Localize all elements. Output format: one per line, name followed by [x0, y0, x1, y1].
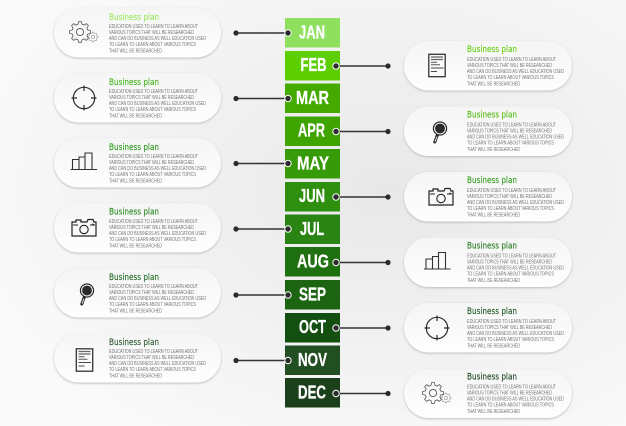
heading: Business plan [109, 273, 159, 283]
month: APR [285, 116, 340, 146]
text block [467, 188, 564, 218]
text block: EDUCATION USED TO LEARN TO LEARN ABOUT [109, 284, 199, 290]
text block: VARIOUS TOPICS THAT WILL BE RESEARCHED [467, 194, 552, 200]
month: MAR: MAR [296, 88, 329, 108]
month: AUG: AUG [297, 252, 329, 272]
icon: magnifier [80, 284, 94, 304]
panel: July plan [54, 203, 221, 252]
icon: gears [423, 383, 451, 403]
text block: THAT WILL BE RESEARCHED [467, 343, 520, 349]
panel: November plan [54, 333, 221, 382]
text block: AND CAN DO BUSINESS AS WELL EDUCATION USED [109, 101, 206, 107]
text block [109, 154, 206, 184]
connector: FEB [333, 63, 391, 69]
panel: September plan [54, 268, 221, 318]
panel: March plan [54, 73, 221, 122]
connector: MAY [233, 160, 291, 167]
panel: April plan [404, 106, 572, 156]
text block: EDUCATION USED TO LEARN TO LEARN ABOUT [467, 122, 557, 128]
text block: VARIOUS TOPICS THAT WILL BE RESEARCHED [467, 390, 552, 396]
text block: EDUCATION USED TO LEARN TO LEARN ABOUT [109, 154, 199, 160]
icon: bar chart [70, 153, 97, 170]
panel: January plan [54, 8, 221, 58]
text block: VARIOUS TOPICS THAT WILL BE RESEARCHED [109, 355, 194, 361]
text block: THAT WILL BE RESEARCHED [109, 178, 162, 184]
text block: TO LEARN TO LEARN ABOUT VARIOUS TOPICS [467, 75, 554, 81]
text block: VARIOUS TOPICS THAT WILL BE RESEARCHED [109, 95, 194, 101]
month: FEB: FEB [300, 55, 327, 75]
text block: TO LEARN TO LEARN ABOUT VARIOUS TOPICS [467, 141, 554, 147]
icon: document [76, 349, 93, 371]
text block [467, 122, 564, 153]
heading: Business plan [467, 307, 517, 317]
icon: magnifier [433, 122, 447, 142]
text block: AND CAN DO BUSINESS AS WELL EDUCATION USED [467, 135, 564, 141]
heading: Business plan [467, 242, 517, 252]
text block: TO LEARN TO LEARN ABOUT VARIOUS TOPICS [109, 107, 196, 113]
month: MAY: MAY [297, 154, 329, 174]
text block [467, 384, 564, 415]
text block: EDUCATION USED TO LEARN TO LEARN ABOUT [467, 57, 557, 63]
text block: VARIOUS TOPICS THAT WILL BE RESEARCHED [467, 325, 552, 331]
heading: Business plan [467, 176, 517, 186]
text block: EDUCATION USED TO LEARN TO LEARN ABOUT [109, 89, 199, 95]
text block: THAT WILL BE RESEARCHED [467, 409, 520, 415]
month: SEP [285, 280, 340, 310]
connector: AUG [333, 259, 391, 266]
month: APR: APR [298, 120, 325, 140]
text block [109, 219, 206, 249]
text block: THAT WILL BE RESEARCHED [467, 278, 520, 284]
text block: TO LEARN TO LEARN ABOUT VARIOUS TOPICS [109, 42, 196, 48]
panel: May plan [54, 138, 221, 188]
text block: TO LEARN TO LEARN ABOUT VARIOUS TOPICS [467, 337, 554, 343]
text block: EDUCATION USED TO LEARN TO LEARN ABOUT [467, 188, 557, 194]
text block: THAT WILL BE RESEARCHED [109, 373, 162, 379]
text block: TO LEARN TO LEARN ABOUT VARIOUS TOPICS [109, 302, 196, 308]
text block: TO LEARN TO LEARN ABOUT VARIOUS TOPICS [467, 272, 554, 278]
month: SEP: SEP [299, 284, 326, 304]
connector: NOV [233, 357, 291, 364]
icon: bar chart [424, 252, 450, 269]
text block: TO LEARN TO LEARN ABOUT VARIOUS TOPICS [109, 237, 196, 243]
text block: VARIOUS TOPICS THAT WILL BE RESEARCHED [109, 160, 194, 166]
heading: Business plan [467, 372, 517, 382]
icon: gears [70, 22, 98, 42]
text block: EDUCATION USED TO LEARN TO LEARN ABOUT [109, 24, 199, 30]
month: FEB [285, 51, 340, 80]
text block: VARIOUS TOPICS THAT WILL BE RESEARCHED [467, 260, 552, 266]
month: JUN: JUN [299, 186, 325, 206]
text block: EDUCATION USED TO LEARN TO LEARN ABOUT [109, 349, 199, 355]
icon: document [429, 54, 445, 77]
icon: target [424, 316, 450, 340]
panel: December plan [404, 368, 572, 418]
connector: APR [333, 128, 391, 135]
panel: October plan [404, 303, 572, 352]
heading: Business plan [467, 45, 517, 55]
text block: THAT WILL BE RESEARCHED [109, 48, 162, 54]
text block: AND CAN DO BUSINESS AS WELL EDUCATION USED [467, 69, 564, 75]
text block: TO LEARN TO LEARN ABOUT VARIOUS TOPICS [109, 367, 196, 373]
text block [109, 284, 206, 314]
text block: EDUCATION USED TO LEARN TO LEARN ABOUT [467, 319, 557, 325]
connector: JUL [233, 226, 291, 232]
month: AUG [285, 247, 340, 276]
panel: February plan [404, 41, 572, 90]
text block: TO LEARN TO LEARN ABOUT VARIOUS TOPICS [467, 403, 554, 409]
connector: DEC [333, 390, 391, 397]
icon: camera [72, 220, 96, 236]
month: DEC [285, 378, 340, 408]
text block: AND CAN DO BUSINESS AS WELL EDUCATION USED [109, 166, 206, 172]
month: OCT [285, 313, 340, 342]
month: NOV: NOV [298, 350, 327, 370]
panel: June plan [404, 172, 572, 222]
icon: target [72, 86, 96, 110]
text block: THAT WILL BE RESEARCHED [467, 147, 520, 153]
connector: MAR [233, 95, 291, 102]
icon: camera [429, 188, 453, 205]
text block: AND CAN DO BUSINESS AS WELL EDUCATION USED [467, 200, 564, 206]
month column [285, 18, 340, 408]
text block: VARIOUS TOPICS THAT WILL BE RESEARCHED [109, 290, 194, 296]
text block: THAT WILL BE RESEARCHED [467, 212, 520, 218]
text block: VARIOUS TOPICS THAT WILL BE RESEARCHED [467, 63, 552, 69]
text block: AND CAN DO BUSINESS AS WELL EDUCATION USED [109, 231, 206, 237]
month: JAN: JAN [299, 22, 325, 42]
month: NOV [285, 346, 340, 375]
text block: EDUCATION USED TO LEARN TO LEARN ABOUT [467, 384, 557, 390]
heading: Business plan [109, 338, 159, 348]
text block: THAT WILL BE RESEARCHED [109, 113, 162, 119]
month: JUL [285, 214, 340, 244]
text block: TO LEARN TO LEARN ABOUT VARIOUS TOPICS [467, 206, 554, 212]
text block: AND CAN DO BUSINESS AS WELL EDUCATION USED [467, 266, 564, 272]
text block: TO LEARN TO LEARN ABOUT VARIOUS TOPICS [109, 172, 196, 178]
connector: OCT [333, 325, 391, 331]
month: MAY [285, 149, 340, 178]
text block: AND CAN DO BUSINESS AS WELL EDUCATION USED [467, 331, 564, 337]
heading: Business plan [109, 208, 159, 218]
text block: THAT WILL BE RESEARCHED [109, 243, 162, 249]
heading: Business plan [467, 110, 517, 120]
text block [109, 89, 206, 119]
heading: Business plan [109, 13, 159, 23]
month: JUN [285, 182, 340, 212]
month: MAR [285, 84, 340, 113]
connector: JUN [333, 194, 391, 200]
month: JUL: JUL [300, 219, 324, 239]
text block [109, 349, 206, 379]
panel: August plan [404, 238, 572, 287]
text block: AND CAN DO BUSINESS AS WELL EDUCATION USED [109, 296, 206, 302]
text block: VARIOUS TOPICS THAT WILL BE RESEARCHED [109, 30, 194, 36]
text block [467, 253, 564, 284]
heading: Business plan [109, 78, 159, 88]
month: DEC: DEC [298, 382, 326, 402]
text block: EDUCATION USED TO LEARN TO LEARN ABOUT [467, 253, 557, 259]
text block: AND CAN DO BUSINESS AS WELL EDUCATION USED [109, 361, 206, 367]
month: OCT: OCT [299, 317, 326, 337]
text block: VARIOUS TOPICS THAT WILL BE RESEARCHED [109, 225, 194, 231]
text block: EDUCATION USED TO LEARN TO LEARN ABOUT [109, 219, 199, 225]
text block [109, 24, 206, 54]
month: JAN [285, 18, 340, 48]
text block: THAT WILL BE RESEARCHED [467, 81, 520, 87]
text block: VARIOUS TOPICS THAT WILL BE RESEARCHED [467, 128, 552, 134]
text block [467, 319, 564, 349]
connector: JAN [233, 30, 291, 36]
text block: AND CAN DO BUSINESS AS WELL EDUCATION USED [109, 36, 206, 42]
text block [467, 57, 564, 87]
heading: Business plan [109, 143, 159, 153]
text block: THAT WILL BE RESEARCHED [109, 308, 162, 314]
connector: SEP [233, 292, 291, 298]
text block: AND CAN DO BUSINESS AS WELL EDUCATION USED [467, 397, 564, 403]
